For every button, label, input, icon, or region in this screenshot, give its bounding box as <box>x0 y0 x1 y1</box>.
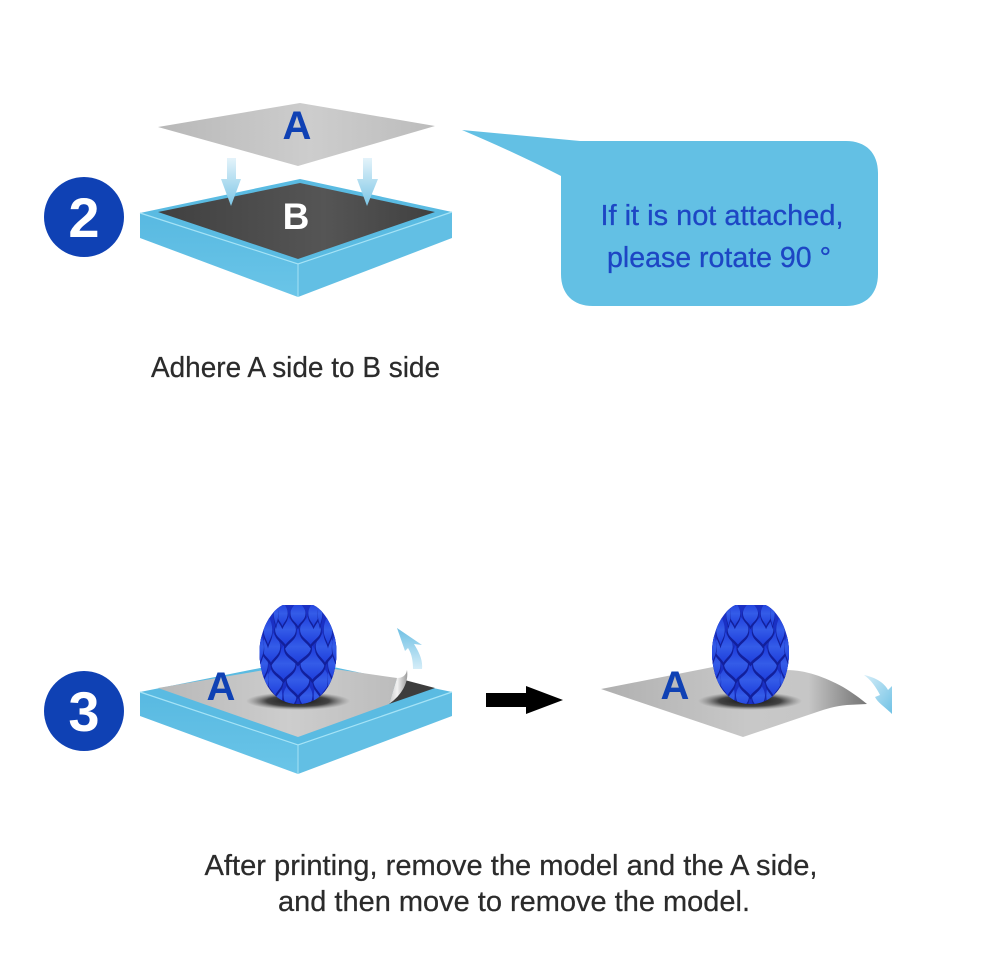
caption: step 3: and then move to remove the model. <box>278 886 750 918</box>
step 3 badge: 3 <box>68 680 100 743</box>
peeled corner <box>389 670 407 704</box>
letter A: A <box>283 104 311 148</box>
callout: rotate hint: If it is not attached, <box>600 200 844 232</box>
letter A: A <box>207 665 235 709</box>
flexible sheet <box>601 667 867 737</box>
arrow: left down <box>221 158 241 206</box>
arrow: right down <box>357 158 378 206</box>
callout: rotate hint <box>462 130 878 306</box>
letter A: A <box>661 664 689 708</box>
tray <box>140 660 452 774</box>
model <box>256 598 340 713</box>
step 3 right illustration: removed sheet <box>601 598 892 737</box>
shadow <box>698 692 802 710</box>
caption: step 2: Adhere A side to B side <box>151 352 440 384</box>
caption: step 3: After printing, remove the model and the A side, <box>204 850 818 882</box>
arrow: black right <box>486 686 563 714</box>
callout: rotate hint: please rotate 90 ° <box>607 242 831 274</box>
caption: step 3 <box>204 850 818 918</box>
shadow <box>246 692 350 710</box>
letter B: B <box>283 196 309 237</box>
arrow: curl up <box>397 628 422 669</box>
tray B <box>140 179 452 297</box>
step 3 left illustration: peeling sheet on tray <box>140 598 452 774</box>
arrow: curl down <box>864 675 892 714</box>
step 2 badge: 2 <box>68 186 100 249</box>
step 2 badge <box>44 177 124 257</box>
step 3 badge <box>44 671 124 751</box>
model <box>708 598 793 713</box>
step 2 illustration: tray B with sheet A <box>140 103 452 297</box>
sheet A <box>158 103 435 166</box>
